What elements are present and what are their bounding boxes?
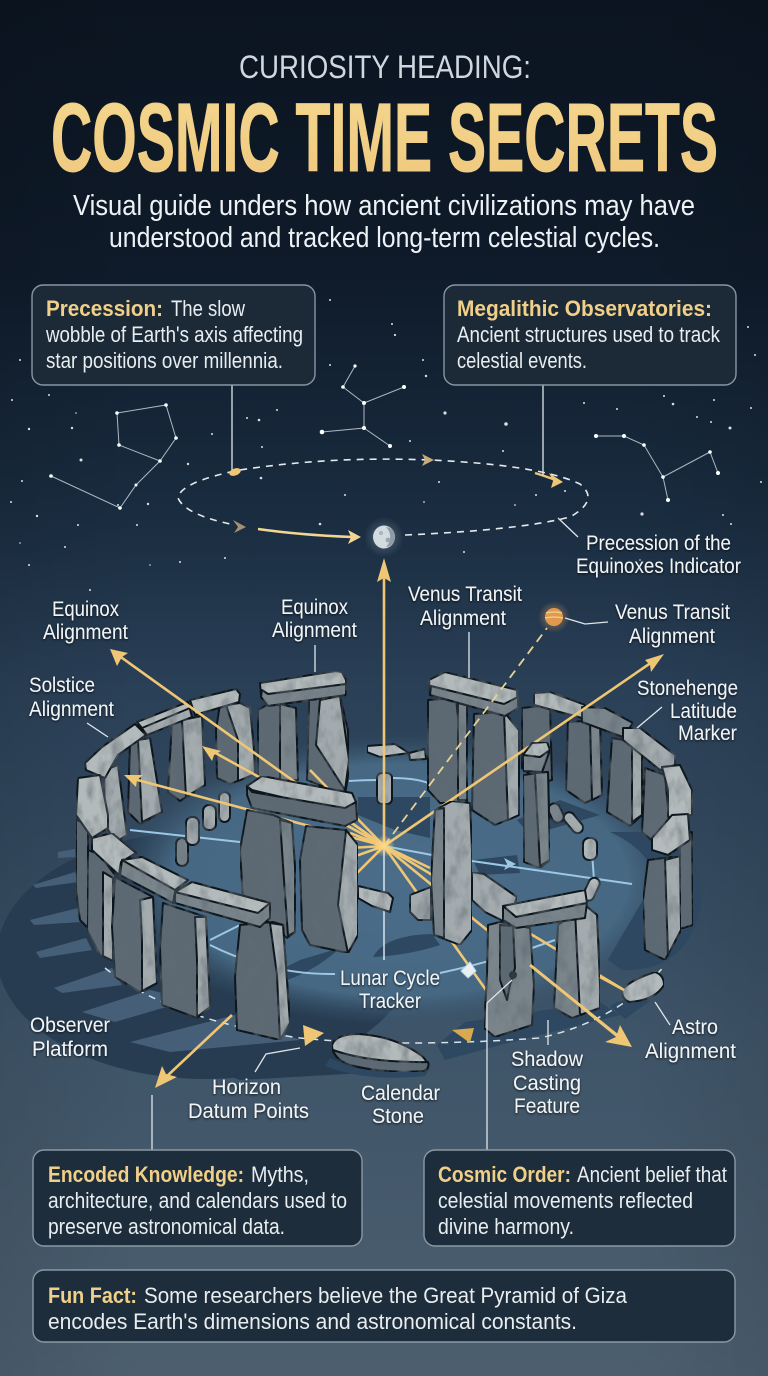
- label: solstice: [29, 674, 114, 721]
- foreground rocks: [332, 972, 664, 1072]
- label: equinox left: Alignment: [43, 621, 128, 644]
- label: equinox left: Equinox: [52, 598, 119, 621]
- label: equinox center: Alignment: [272, 619, 357, 642]
- precession orbit: [178, 454, 588, 544]
- label: venus transit center: [408, 583, 522, 630]
- kicker: CURIOSITY HEADING:: [239, 49, 531, 85]
- panel: precession: Precession:: [46, 296, 163, 321]
- label: shadow casting: Shadow: [511, 1048, 584, 1071]
- constellations: [49, 364, 720, 510]
- ground shadow with stripes: [0, 831, 413, 1080]
- label: shadow casting: Feature: [514, 1095, 580, 1118]
- panel: precession: The slow: [171, 296, 245, 321]
- small monolith with cap: [523, 742, 550, 868]
- panel: megalithic observatories: celestial events.: [457, 348, 587, 373]
- panel: fun fact: Some researchers believe the Great Pyramid of Giza: [144, 1283, 628, 1308]
- subtitle: Visual guide unders how ancient civilizations may have: [73, 190, 695, 222]
- panel: cosmic order: Ancient belief that: [577, 1162, 727, 1187]
- label: stonehenge latitude: Latitude: [670, 700, 737, 723]
- panel: cosmic order: [424, 1150, 735, 1246]
- center monolith: [431, 801, 472, 945]
- diagram labels: [29, 532, 741, 1128]
- label: precession indicator: Equinoxes Indicator: [576, 555, 741, 578]
- label: lunar cycle: [340, 967, 440, 1013]
- title block: [51, 49, 718, 254]
- label: shadow casting: [511, 1048, 584, 1118]
- label: horizon datum: [188, 1076, 309, 1123]
- label: calendar stone: Stone: [372, 1105, 424, 1128]
- label: equinox center: Equinox: [281, 596, 348, 619]
- label: venus transit right: Alignment: [629, 625, 715, 648]
- label: stonehenge latitude: [637, 677, 738, 745]
- label: observer platform: [30, 1014, 110, 1061]
- label: calendar stone: Calendar: [361, 1082, 440, 1105]
- panel: fun fact: [33, 1270, 735, 1342]
- shadow casting dot: [509, 971, 517, 979]
- panel: fun fact: encodes Earth's dimensions and astronomical constants.: [48, 1309, 577, 1334]
- label: shadow casting: Casting: [513, 1072, 581, 1095]
- label: stonehenge latitude: Marker: [678, 722, 737, 745]
- label: venus transit right: Venus Transit: [615, 601, 730, 624]
- panel: cosmic order: celestial movements reflected: [438, 1188, 693, 1213]
- label: precession indicator: [576, 532, 741, 578]
- label: venus transit center: Alignment: [420, 607, 506, 630]
- panel: megalithic observatories: [444, 285, 736, 385]
- panel: fun fact: Fun Fact:: [48, 1283, 137, 1308]
- fallen stones: [358, 872, 517, 922]
- leader lines: [87, 385, 670, 1150]
- label: calendar stone: [361, 1082, 440, 1128]
- panel: megalithic observatories: Megalithic Observatories:: [457, 296, 712, 321]
- label: solstice: Solstice: [29, 674, 95, 697]
- front left trilithon: [240, 776, 358, 953]
- panel: encoded knowledge: preserve astronomical data.: [48, 1214, 285, 1239]
- label: equinox center: [272, 596, 357, 642]
- label: astro alignment: [645, 1016, 736, 1063]
- label: solstice: Alignment: [29, 698, 114, 721]
- label: stonehenge latitude: Stonehenge: [637, 677, 738, 700]
- label: horizon datum: Datum Points: [188, 1100, 309, 1123]
- label: observer platform: Platform: [32, 1038, 108, 1061]
- venus: [538, 601, 570, 633]
- panel: encoded knowledge: [33, 1150, 362, 1246]
- ground lines and lunar circle: [130, 778, 632, 974]
- label: venus transit center: Venus Transit: [408, 583, 522, 606]
- moon: [364, 517, 404, 557]
- label: astro alignment: Astro: [672, 1016, 718, 1039]
- panel: cosmic order: Cosmic Order:: [438, 1162, 571, 1187]
- foreground alignment rays: [155, 962, 632, 1088]
- panel: encoded knowledge: Encoded Knowledge:: [48, 1162, 244, 1187]
- panel: precession: wobble of Earth's axis affecting: [45, 322, 303, 347]
- panel: encoded knowledge: Myths,: [251, 1162, 309, 1187]
- label: horizon datum: Horizon: [212, 1076, 281, 1099]
- label: lunar cycle: Tracker: [359, 990, 421, 1013]
- ground disc and cast shadows: [115, 735, 702, 1078]
- label: equinox left: [43, 598, 128, 644]
- front right outer stone: [643, 856, 681, 960]
- label: lunar cycle: Lunar Cycle: [340, 967, 440, 990]
- back right stones: [367, 672, 693, 929]
- panel: precession: [32, 285, 315, 385]
- panel: megalithic observatories: Ancient structures used to track: [457, 322, 721, 347]
- front left outer arc: [87, 833, 290, 1040]
- panel: cosmic order: divine harmony.: [438, 1214, 574, 1239]
- front right trilithon: [484, 890, 600, 1037]
- starfield: [10, 299, 762, 591]
- alignment rays behind front stones: [110, 558, 664, 1045]
- panel: encoded knowledge: architecture, and calendars used to: [48, 1188, 347, 1213]
- horizon dashed circle: [105, 965, 665, 1046]
- panel: precession: star positions over millennia.: [46, 348, 283, 373]
- label: observer platform: Observer: [30, 1014, 110, 1037]
- label: venus transit right: [615, 601, 730, 648]
- label: precession indicator: Precession of the: [586, 532, 731, 555]
- back left stones: [76, 671, 349, 928]
- label: astro alignment: Alignment: [645, 1040, 736, 1063]
- subtitle: [73, 190, 695, 254]
- subtitle: understood and tracked long-term celestial cycles.: [109, 222, 660, 254]
